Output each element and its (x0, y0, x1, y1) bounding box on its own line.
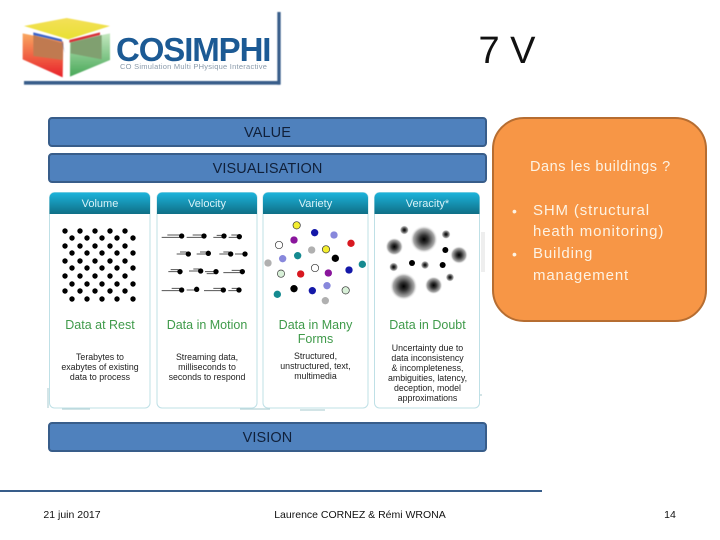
bullet: shm: heath monitoring) (533, 223, 664, 240)
bullet marks: • (512, 203, 517, 219)
bullet: building management (533, 245, 629, 284)
footer page number: 14 (664, 509, 676, 521)
header: velocity: Velocity (188, 198, 226, 210)
description: velocity: seconds to respond (169, 372, 245, 382)
bullet: building management: Building (533, 245, 593, 262)
panel: veracity (374, 192, 480, 408)
logo (22, 11, 282, 86)
label: data in many forms: Data in Many (279, 318, 352, 332)
header: volume: Volume (82, 198, 118, 210)
label: data at rest: Data at Rest (65, 318, 135, 332)
callout: dans les buildings (492, 117, 707, 322)
bullet list (512, 202, 664, 284)
logo tagline: CO Simulation Multi PHysique Interactive (120, 62, 267, 71)
description: veracity: ambiguities, latency, (388, 373, 467, 383)
panel: volume (50, 192, 150, 408)
panel: variety (263, 192, 368, 408)
dots: variety (264, 222, 366, 304)
panel: velocity (157, 192, 257, 408)
bar: value (48, 117, 487, 147)
callout heading: Dans les buildings ? (530, 159, 671, 175)
logo wordmark: COSIMPHI (116, 31, 270, 68)
bar: visualisation (48, 153, 487, 183)
description: volume: data to process (70, 372, 130, 382)
bar: vision (48, 422, 487, 452)
footer date: 21 juin 2017 (43, 509, 101, 521)
description: veracity: data inconsistency (391, 353, 464, 363)
bar: value: VALUE (244, 125, 291, 141)
label: data in doubt: Data in Doubt (389, 318, 466, 332)
bar: vision: VISION (243, 430, 292, 446)
bullet: shm (533, 202, 664, 240)
description: veracity: & incompleteness, (392, 363, 463, 373)
description: velocity: milliseconds to (178, 362, 236, 372)
description: veracity (388, 343, 467, 403)
description: variety: multimedia (294, 371, 337, 381)
description: volume (61, 352, 139, 382)
dots: veracity (385, 225, 468, 300)
description: variety (280, 351, 351, 381)
description: veracity: approximations (398, 393, 457, 403)
header: veracity: Veracity* (406, 198, 449, 210)
footer rule (0, 490, 542, 492)
description: velocity (168, 352, 245, 382)
bar: visualisation: VISUALISATION (213, 161, 322, 177)
description: veracity: deception, model (394, 383, 461, 393)
label: data in many forms (279, 318, 352, 346)
label: data in motion: Data in Motion (167, 318, 247, 332)
description: variety: Structured, (294, 351, 337, 361)
bullet: building management: management (533, 267, 629, 284)
description: velocity: Streaming data, (176, 352, 238, 362)
dots: velocity (162, 233, 248, 293)
dots: volume (62, 228, 136, 302)
header: variety: Variety (299, 198, 332, 210)
title: 7 V (478, 30, 536, 72)
description: variety: unstructured, text, (280, 361, 351, 371)
description: volume: exabytes of existing (61, 362, 139, 372)
bullet: shm: SHM (structural (533, 202, 650, 219)
description: volume: Terabytes to (76, 352, 124, 362)
second bullet mark: • (512, 246, 517, 262)
label: data in many forms: Forms (298, 332, 333, 346)
footer authors: Laurence CORNEZ & Rémi WRONA (274, 509, 446, 521)
description: veracity: Uncertainty due to (392, 343, 463, 353)
